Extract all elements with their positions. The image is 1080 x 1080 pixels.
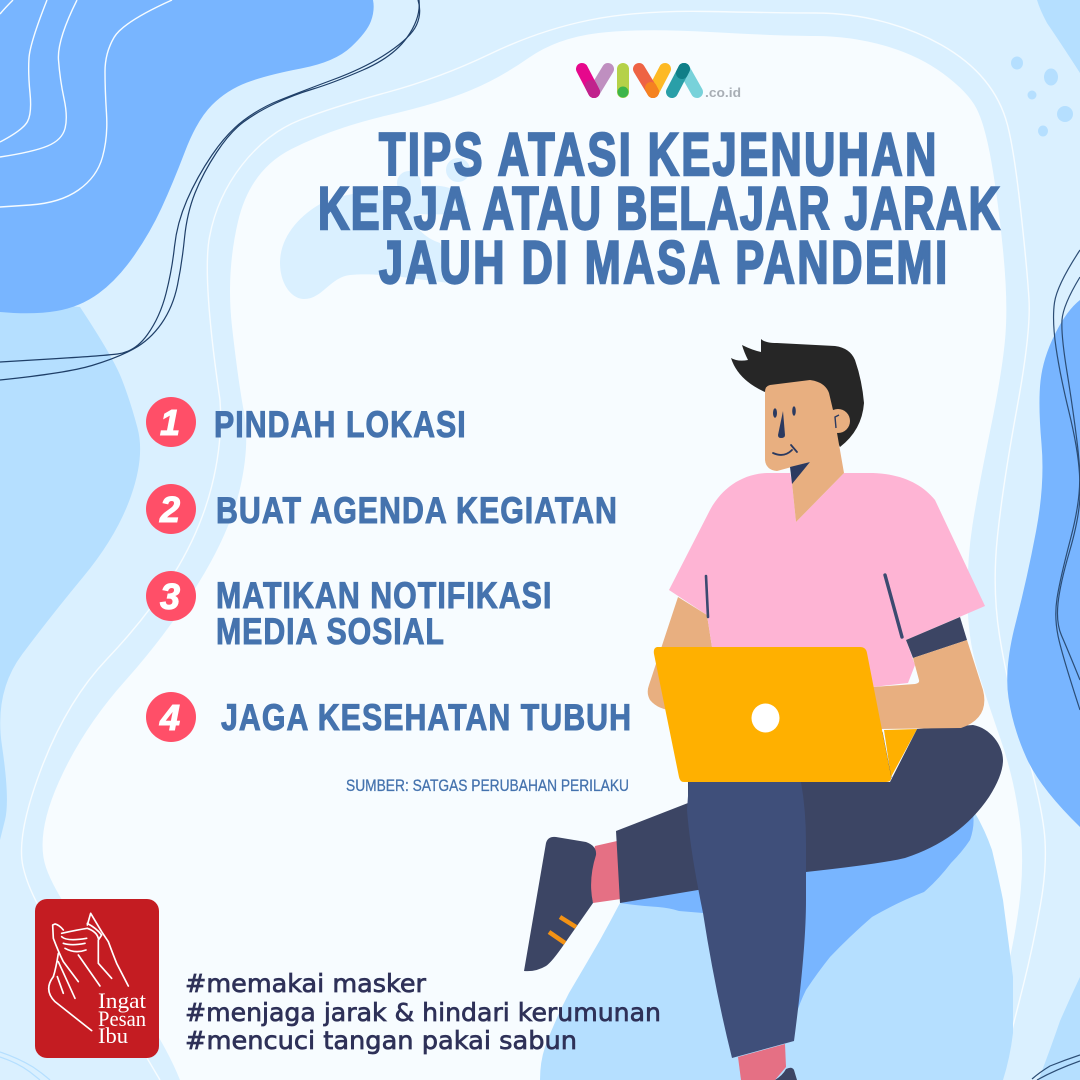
logo: VIVA.co.id bbox=[582, 69, 741, 100]
left arm bbox=[648, 597, 714, 710]
tip 3: MATIKAN NOTIFIKASI bbox=[216, 575, 551, 617]
title: JAUH DI MASA PANDEMI bbox=[379, 230, 947, 297]
tip 3: MEDIA SOSIAL bbox=[216, 611, 444, 653]
tip 3: 3 bbox=[160, 576, 180, 617]
tip 1 bbox=[146, 397, 466, 447]
right sleeve band bbox=[906, 617, 967, 658]
shirt bbox=[669, 473, 985, 690]
logo: Ingat Pesan Ibu: Ingat bbox=[98, 988, 146, 1013]
tip 3 bbox=[146, 571, 551, 653]
tip 1: 1 bbox=[160, 402, 180, 443]
laptop bbox=[654, 647, 917, 782]
tip 2: 2 bbox=[159, 489, 180, 530]
front leg and shoe bbox=[687, 782, 806, 1080]
tips list bbox=[146, 397, 631, 742]
back leg and shoe bbox=[524, 725, 1003, 971]
illustration: man with laptop bbox=[524, 339, 1003, 1080]
hashtags: #menjaga jarak & hindari kerumunan bbox=[185, 998, 661, 1027]
title bbox=[318, 122, 1000, 297]
right arm bbox=[873, 640, 984, 729]
logo: Ingat Pesan Ibu: Pesan bbox=[98, 1006, 146, 1031]
title: TIPS ATASI KEJENUHAN bbox=[379, 122, 936, 189]
logo: Ingat Pesan Ibu: Ibu bbox=[98, 1023, 128, 1048]
title: KERJA ATAU BELAJAR JARAK bbox=[318, 176, 1000, 243]
tip 4: 4 bbox=[159, 697, 180, 738]
source note: SUMBER: SATGAS PERUBAHAN PERILAKU bbox=[346, 776, 629, 795]
hashtags bbox=[185, 969, 661, 1055]
shirt creases bbox=[706, 576, 708, 617]
logo: VIVA.co.id: .co.id bbox=[705, 85, 741, 100]
icon: hands bbox=[49, 913, 128, 1031]
head and hair bbox=[731, 339, 864, 522]
tip 2: BUAT AGENDA KEGIATAN bbox=[216, 490, 617, 532]
hashtags: #mencuci tangan pakai sabun bbox=[185, 1026, 577, 1055]
hashtags: #memakai masker bbox=[185, 969, 427, 998]
logo: Ingat Pesan Ibu bbox=[35, 899, 159, 1058]
tip 1: PINDAH LOKASI bbox=[214, 404, 466, 446]
tip 4: JAGA KESEHATAN TUBUH bbox=[221, 697, 631, 739]
